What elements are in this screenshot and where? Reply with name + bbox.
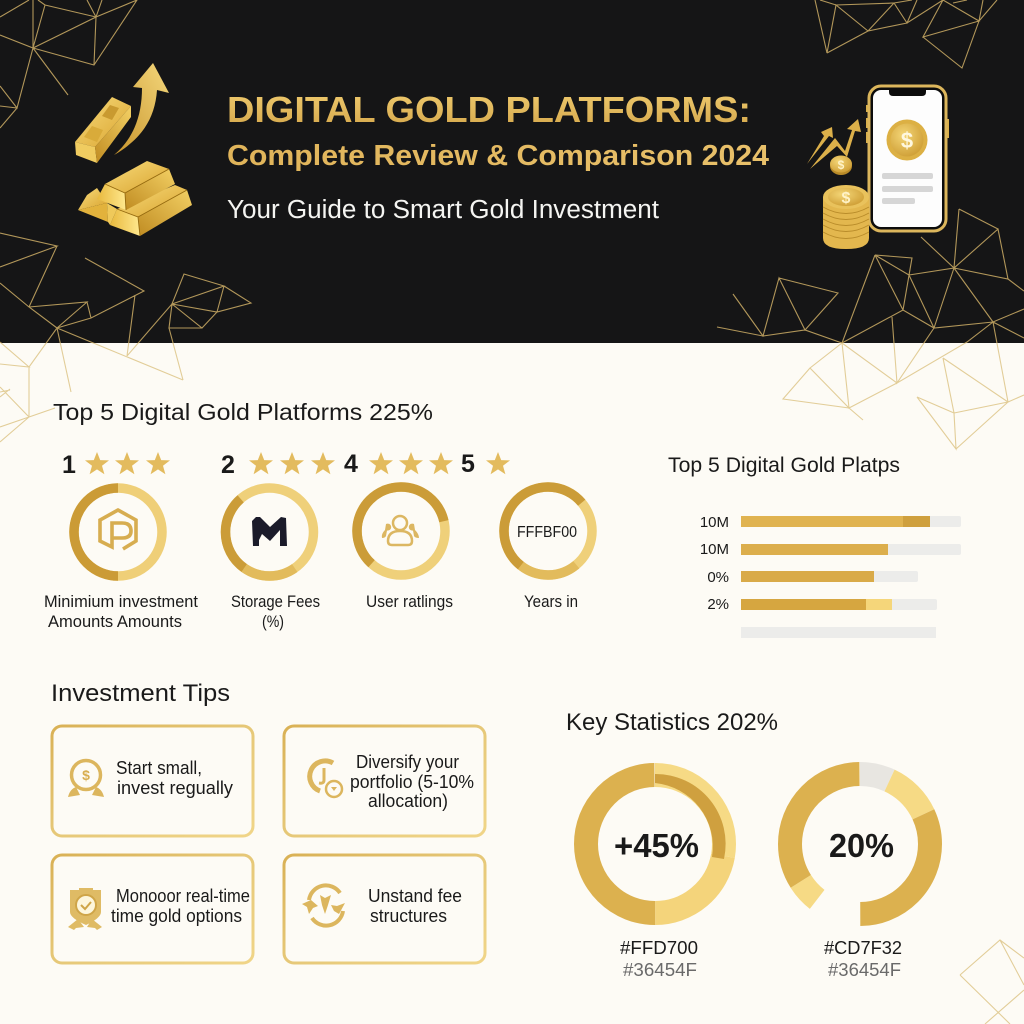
tip card: diversify — [284, 726, 485, 836]
donut chart: 20%: 20% — [829, 827, 894, 864]
tip card: start small: invest regually — [117, 778, 233, 798]
donut chart: +45%: +45% — [614, 827, 699, 864]
bar chart: 2% — [707, 596, 729, 613]
donut chart: +45%: #36454F — [623, 960, 697, 980]
tagline: Your Guide to Smart Gold Investment — [227, 196, 659, 224]
donut chart: 20%: #36454F — [828, 960, 901, 980]
icon: phone with coins: $ — [901, 128, 913, 153]
tip card: start small: $ — [82, 767, 90, 783]
platform 4: rank, stars, ring, label — [344, 450, 453, 611]
tip card: fee structures — [284, 855, 485, 963]
platform 4: rank, stars, ring, label: User ratlings — [366, 593, 453, 611]
bar chart — [700, 514, 961, 638]
platform 2: rank, stars, ring, label: Storage Fees — [231, 593, 320, 611]
bar chart: 10M — [700, 541, 729, 558]
section heading: investment tips: Investment Tips — [51, 680, 230, 707]
platform 4: rank, stars, ring, label: 4 — [344, 450, 358, 478]
platform 5: rank, star, ring, label: 5 — [461, 450, 475, 478]
platform 2: rank, stars, ring, label — [221, 451, 335, 631]
platform 2: rank, stars, ring, label: (%) — [262, 613, 284, 631]
platform 5: rank, star, ring, label: Years in — [524, 593, 578, 611]
section heading: key statistics: Key Statistics 202% — [566, 709, 778, 736]
platform 5: rank, star, ring, label: FFFBF00 — [517, 524, 577, 541]
platform 2: rank, stars, ring, label: 2 — [221, 451, 235, 479]
tip card: fee structures: structures — [370, 906, 447, 926]
subtitle: Complete Review & Comparison 2024 — [227, 140, 769, 172]
donut chart: 20%: #CD7F32 — [824, 938, 902, 958]
section heading: top 5 platforms: Top 5 Digital Gold Platforms 225% — [53, 399, 433, 425]
platform 1: rank, stars, ring, label — [44, 451, 198, 631]
icon: phone with coins: $ — [838, 158, 845, 172]
tip card: monitor: time gold options — [111, 906, 242, 926]
donut chart: +45% — [586, 774, 726, 980]
bar chart: 0% — [707, 569, 729, 586]
icon: phone with coins — [807, 86, 949, 249]
tip card: start small — [52, 726, 253, 836]
platform 1: rank, stars, ring, label: 1 — [62, 451, 76, 479]
tip card: monitor: Monooor real-time — [116, 886, 250, 906]
tip card: diversify: allocation) — [368, 791, 448, 811]
tip card: diversify: Diversify your — [356, 752, 459, 772]
icon: phone with coins: $ — [842, 190, 851, 207]
platform 1: rank, stars, ring, label: Amounts Amounts — [48, 613, 182, 631]
tip card: fee structures: Unstand fee — [368, 886, 462, 906]
bar chart: 10M — [700, 514, 729, 531]
donut chart: 20% — [790, 774, 930, 980]
tip card: monitor — [52, 855, 253, 963]
donut chart: +45%: #FFD700 — [620, 938, 698, 958]
bar chart heading: Top 5 Digital Gold Platps — [668, 454, 900, 477]
tip card: start small: Start small, — [116, 758, 202, 778]
tip card: diversify: portfolio (5-10% — [350, 772, 474, 792]
header band — [0, 0, 1024, 343]
platform 1: rank, stars, ring, label: Minimium investment — [44, 593, 198, 611]
platform 5: rank, star, ring, label — [461, 450, 592, 611]
title: DIGITAL GOLD PLATFORMS: — [227, 89, 751, 130]
icon: gold bars with rising arrow — [75, 63, 192, 236]
